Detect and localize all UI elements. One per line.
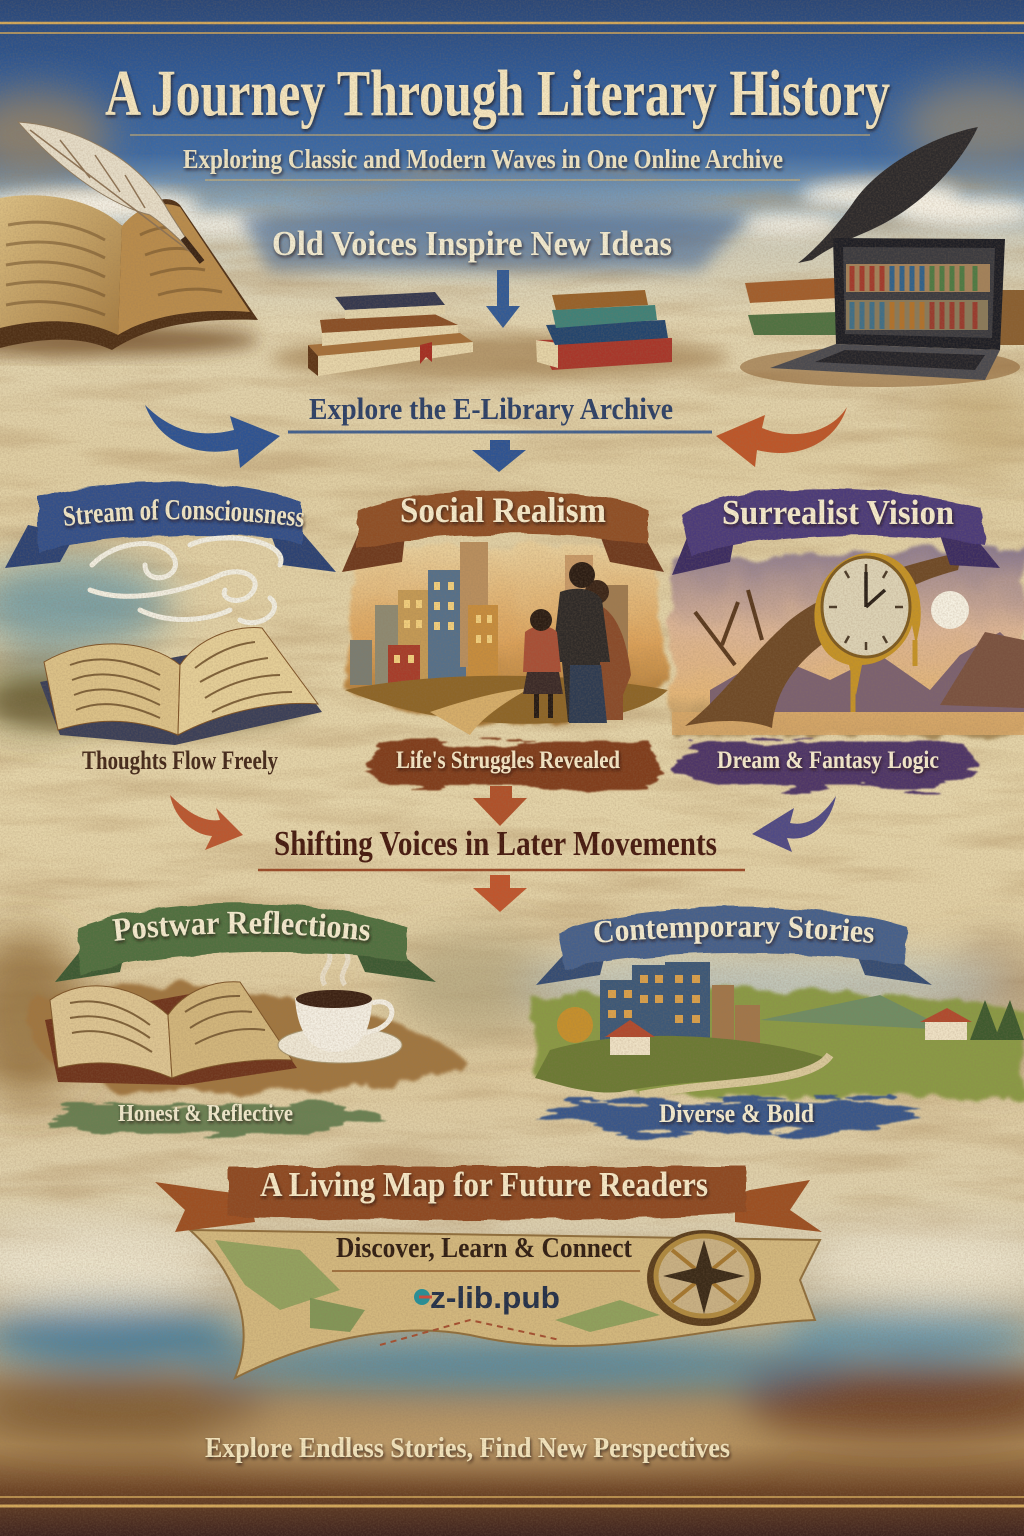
- illustration: parchment map: [190, 1230, 820, 1378]
- logo: z-lib.pub: z-lib.pub: [430, 1280, 560, 1315]
- banner: surrealist: [672, 488, 1000, 575]
- caption: life's struggles: [365, 742, 662, 788]
- illustration: dream landscape: [672, 540, 1024, 735]
- panel: stream of consciousness: [0, 481, 336, 775]
- illustration: open book and quill: [0, 122, 260, 356]
- caption: diverse and bold: Diverse & Bold: [659, 1099, 814, 1128]
- caption: dream logic: [672, 742, 982, 788]
- illustration: city and countryside: [535, 962, 1024, 1098]
- icon: compass: [647, 1230, 761, 1326]
- arrow: center blue: [472, 440, 526, 472]
- icon: melting clock: [814, 553, 921, 712]
- arrow: down to books: [486, 270, 520, 328]
- illustration: quill and laptop: [740, 127, 1024, 387]
- heading: shifting voices: Shifting Voices in Later Movements: [274, 824, 717, 863]
- caption: honest and reflective: [45, 1101, 385, 1134]
- banner: postwar: Postwar Reflections: [112, 910, 372, 944]
- icon: right book stack: [536, 290, 672, 370]
- panel: surrealist vision: [672, 488, 1024, 788]
- banner: stream: Stream of Consciousness: [62, 499, 307, 530]
- arrow: lower center top: [473, 786, 527, 826]
- heading: explore archive: Explore the E-Library Archive: [309, 391, 673, 426]
- subtitle: Exploring Classic and Modern Waves in One Online Archive: [183, 144, 783, 174]
- caption: life's struggles: Life's Struggles Revealed: [396, 747, 620, 774]
- icon: left book stack: [270, 292, 730, 380]
- caption: honest and reflective: Honest & Reflective: [118, 1101, 293, 1127]
- banner: social realism: [342, 490, 664, 572]
- panel: living map: [155, 1165, 822, 1378]
- illustration: swirling thoughts: [90, 538, 281, 623]
- panel: contemporary stories: [527, 905, 1024, 1141]
- arrow: lower right: [752, 796, 836, 852]
- banner: social realism: Social Realism: [400, 490, 606, 530]
- illustration: city and family: [345, 542, 668, 735]
- banner: postwar: [55, 902, 436, 982]
- heading: old voices: Old Voices Inspire New Ideas: [272, 224, 672, 263]
- banner: living map: [155, 1165, 822, 1232]
- arrow: lower left: [170, 795, 243, 850]
- caption: thoughts flow freely: Thoughts Flow Freely: [82, 746, 278, 775]
- heading: old voices: [240, 215, 750, 270]
- arrow: right orange: [716, 407, 847, 467]
- panel: social realism: [342, 490, 668, 788]
- banner: contemporary: Contemporary Stories: [594, 916, 876, 948]
- banner: contemporary: [536, 905, 932, 985]
- text: discover learn connect: Discover, Learn & Connect: [336, 1233, 633, 1264]
- illustration: open book: [0, 627, 322, 745]
- banner: surrealist: Surrealist Vision: [722, 493, 954, 532]
- arrow: lower center bottom: [473, 875, 527, 912]
- subtitle: [130, 135, 870, 180]
- panel: postwar reflections: [27, 902, 469, 1140]
- arrow: left blue: [145, 405, 280, 468]
- illustration: book and coffee: [28, 945, 465, 1092]
- caption: diverse and bold: [535, 1099, 925, 1133]
- banner: living map: A Living Map for Future Readers: [260, 1165, 708, 1204]
- caption: dream logic: Dream & Fantasy Logic: [717, 747, 939, 774]
- footer tagline: Explore Endless Stories, Find New Perspectives: [205, 1433, 730, 1464]
- banner: stream: [5, 481, 336, 572]
